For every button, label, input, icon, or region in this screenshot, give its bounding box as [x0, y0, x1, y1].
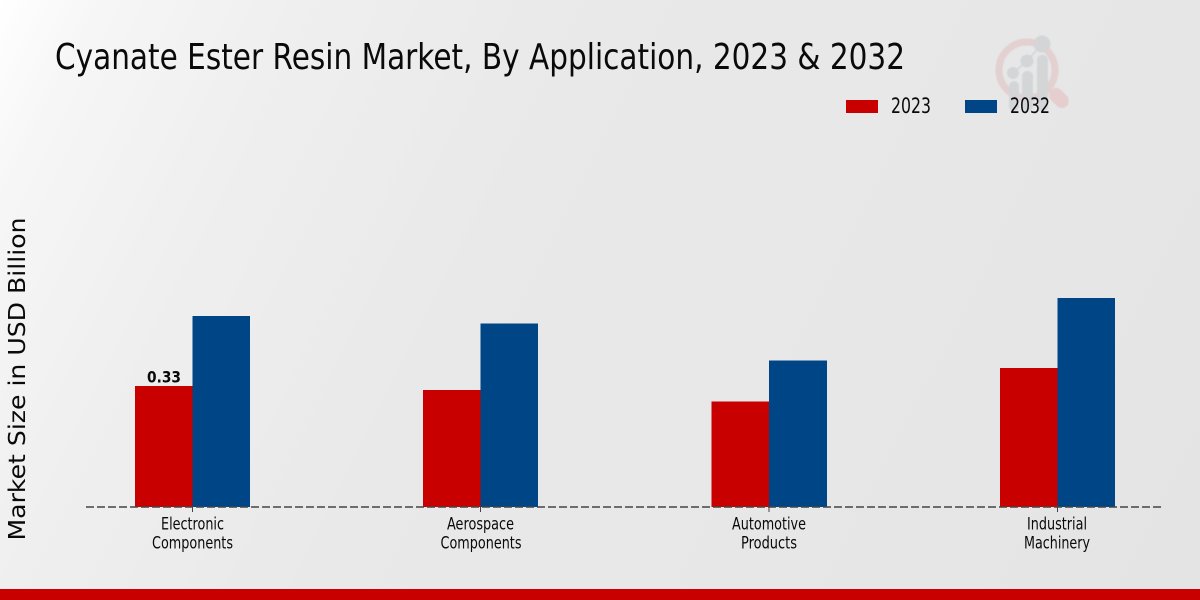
bars: Aerospace Components: [423, 324, 538, 507]
bars: Automotive Products: [712, 360, 827, 507]
title: Cyanate Ester Resin Market, By Application, 2023 & 2032: [55, 37, 905, 78]
x label: Aerospace Components: Components: [440, 534, 522, 554]
x label: Aerospace Components: Aerospace: [447, 514, 514, 534]
bars: Electronic Components: [135, 316, 250, 507]
footer bar: [0, 589, 1200, 600]
y axis title: Market Size in USD Billion: [5, 218, 31, 540]
x label: Industrial Machinery: [1024, 514, 1090, 554]
x label: Electronic Components: Electronic: [161, 514, 224, 534]
x label: Aerospace Components: [440, 514, 522, 554]
value label: 0.33: 0.33: [147, 368, 181, 386]
x label: Automotive Products: [732, 514, 806, 554]
x label: Industrial Machinery: Industrial: [1027, 514, 1087, 534]
x label: Electronic Components: [152, 514, 233, 554]
x label: Electronic Components: Components: [152, 534, 233, 554]
legend: 2023 label: 2023: [891, 94, 931, 118]
legend: [846, 94, 1050, 118]
bar chart: [86, 298, 1164, 554]
legend: 2032 swatch: [965, 100, 997, 113]
legend: 2023 swatch: [846, 100, 878, 113]
x label: Industrial Machinery: Machinery: [1024, 534, 1090, 554]
bars: Industrial Machinery: [1000, 298, 1115, 507]
legend: 2032 label: 2032: [1010, 94, 1050, 118]
x label: Automotive Products: Products: [741, 534, 797, 554]
x axis baseline: [86, 506, 1164, 508]
x label: Automotive Products: Automotive: [732, 514, 806, 534]
icon: watermark logo: [999, 36, 1062, 111]
